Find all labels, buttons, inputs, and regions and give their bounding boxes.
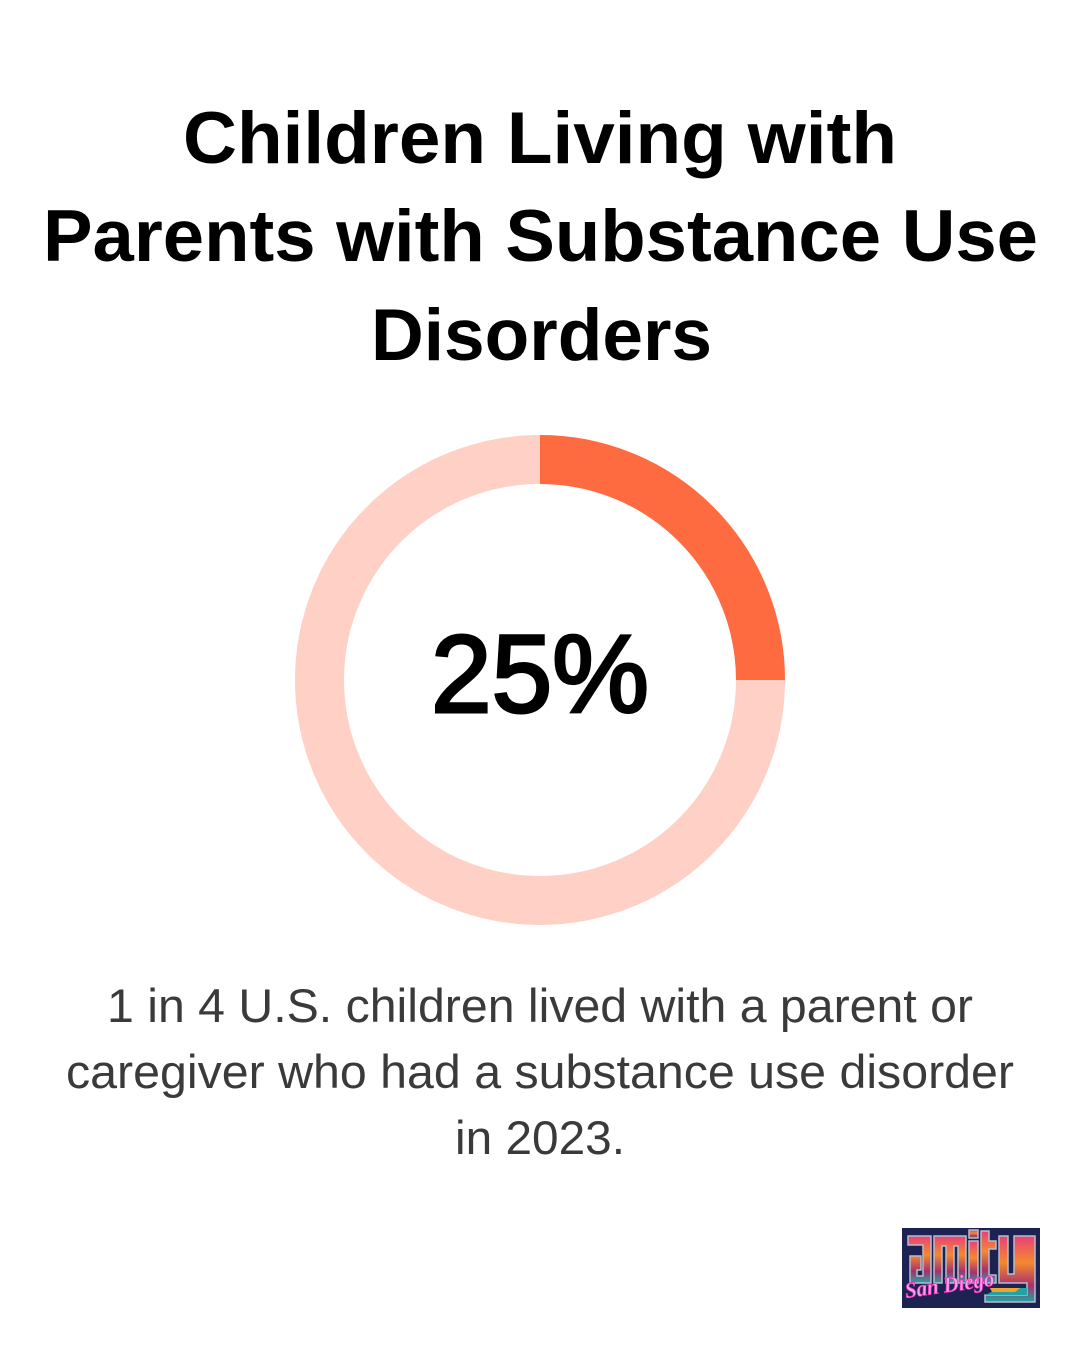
description text: 1 in 4 U.S. children lived with a parent or [107, 979, 973, 1032]
title [43, 98, 1038, 376]
description text: in 2023. [455, 1111, 625, 1164]
logo: Amity San Diego [902, 1228, 1040, 1308]
logo: Amity San Diego: San Diego [903, 1266, 996, 1303]
title: Disorders [371, 295, 712, 376]
title: Parents with Substance Use [43, 196, 1038, 277]
donut chart [320, 460, 760, 900]
donut value: 25% [431, 613, 649, 736]
description text [66, 979, 1014, 1164]
title: Children Living with [183, 98, 897, 179]
description text: caregiver who had a substance use disorder [66, 1045, 1014, 1098]
